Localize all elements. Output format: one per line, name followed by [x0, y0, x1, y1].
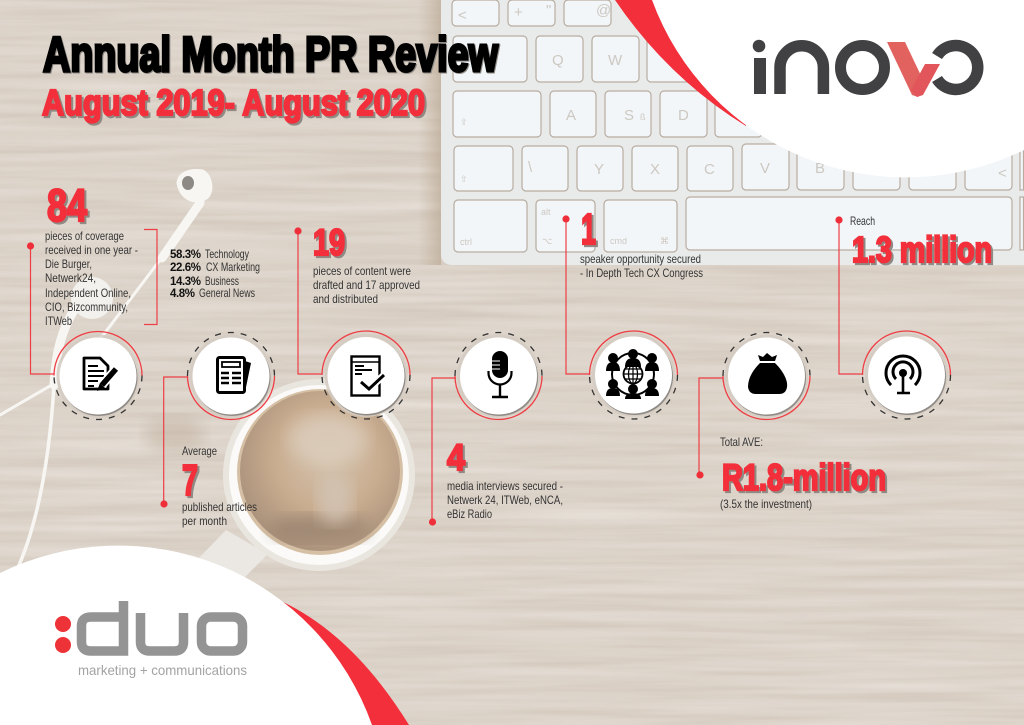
description: ITWeb	[45, 314, 72, 328]
keyboard photo	[441, 0, 1024, 265]
category breakdown: General News	[199, 286, 255, 300]
key legends: S	[624, 107, 634, 124]
title: Annual Month PR Review	[43, 28, 499, 82]
key legends	[458, 2, 1007, 247]
number: 1	[581, 205, 596, 254]
description: received in one year -	[45, 243, 138, 257]
number: 84	[47, 180, 87, 231]
connector dot	[562, 215, 570, 223]
number: 4	[447, 437, 465, 478]
category breakdown: Business	[205, 274, 239, 288]
number: 19	[313, 222, 345, 263]
key legends: ⇪	[460, 117, 468, 127]
key legends: V	[760, 160, 770, 177]
description: published articles	[182, 500, 257, 514]
number: 7	[182, 456, 198, 505]
key legends: W	[608, 52, 623, 69]
description	[313, 264, 420, 306]
description: drafted and 17 approved	[313, 278, 420, 292]
key legends: ctrl	[460, 237, 472, 247]
key legends: ⇧	[460, 174, 468, 184]
key legends: C	[704, 161, 715, 178]
bottom left white circle with red crescent	[0, 546, 409, 725]
description: Independent Online,	[45, 286, 131, 300]
connector dot	[27, 242, 34, 250]
key legends: D	[678, 107, 689, 124]
coffee cup photo	[197, 379, 415, 582]
description: and distributed	[313, 292, 378, 306]
item: 84 pieces of coverage	[27, 180, 260, 420]
note: (3.5x the investment)	[720, 497, 812, 511]
logo: duo	[55, 601, 247, 678]
key legends: Q	[552, 52, 564, 69]
connector	[298, 231, 322, 374]
key legends: X	[650, 161, 660, 178]
key legends: alt	[541, 207, 551, 217]
description: pieces of content were	[313, 264, 411, 278]
item: total AVE	[696, 332, 886, 511]
key legends: ß	[640, 112, 646, 122]
description	[182, 500, 257, 528]
description	[45, 229, 138, 328]
category breakdown: 4.8%	[170, 288, 195, 300]
connector	[699, 378, 723, 475]
connector dot	[160, 500, 168, 508]
description	[580, 252, 703, 280]
icon: broadcast signal	[862, 331, 950, 419]
description: eBiz Radio	[447, 507, 492, 521]
category breakdown: 58.3%	[170, 249, 201, 261]
description: - In Depth Tech CX Congress	[580, 266, 703, 280]
value: R1.8-million	[722, 457, 886, 498]
label: Total AVE:	[720, 435, 763, 449]
connector dot	[294, 227, 302, 235]
category breakdown: 22.6%	[170, 262, 201, 274]
description: CIO, Bizcommunity,	[45, 300, 128, 314]
key legends: ⌥	[542, 236, 552, 246]
connector dot	[696, 471, 704, 479]
key legends: B	[815, 160, 825, 177]
connector	[566, 219, 590, 374]
label: Average	[182, 444, 217, 458]
icon: network of people and globe	[590, 331, 678, 419]
category breakdown: CX Marketing	[206, 260, 260, 274]
earphones photo	[0, 170, 212, 572]
keyboard keys	[452, 0, 1024, 252]
category breakdown: Technology	[205, 247, 249, 261]
icon: money bag	[723, 332, 810, 419]
subtitle: August 2019- August 2020	[42, 82, 425, 123]
key legends: +	[514, 4, 523, 21]
top right white circle with red crescent	[615, 0, 1024, 177]
key legends: <	[458, 7, 467, 24]
value: 1.3 million	[852, 229, 992, 270]
item: reach	[835, 214, 992, 419]
icon: microphone	[455, 332, 542, 419]
description: Netwerk24,	[45, 271, 96, 285]
description: speaker opportunity secured	[580, 252, 701, 266]
description: media interviews secured -	[447, 479, 563, 493]
connector	[30, 246, 54, 374]
label: Reach	[850, 214, 875, 228]
category breakdown	[170, 247, 260, 300]
description: pieces of coverage	[45, 229, 124, 243]
description: per month	[182, 514, 227, 528]
key legends: ⌘	[660, 236, 669, 246]
connector	[839, 220, 863, 374]
connector	[164, 377, 188, 504]
icon: newspaper	[188, 332, 274, 419]
key legends: "	[546, 2, 551, 19]
key legends: A	[566, 107, 576, 124]
key legends: @	[596, 2, 611, 19]
connector	[432, 378, 456, 522]
connector dot	[429, 518, 436, 526]
key legends: <	[998, 165, 1007, 182]
logo: duo: marketing + communications	[78, 662, 247, 678]
description	[447, 479, 563, 521]
item: average 7 published articles	[160, 332, 274, 528]
item: 4 media interviews	[429, 332, 563, 526]
bracket	[144, 230, 157, 324]
category breakdown: 14.3%	[170, 276, 201, 288]
description: Netwerk 24, ITWeb, eNCA,	[447, 493, 563, 507]
connector dot	[835, 216, 843, 224]
item: 1 speaker opportunity	[562, 205, 703, 419]
item: 19 pieces of content	[294, 222, 420, 419]
key legends: \	[528, 159, 533, 176]
key legends: cmd	[610, 236, 627, 246]
icon: checklist	[322, 331, 410, 419]
key legends: Y	[594, 161, 604, 178]
logo: inovo	[753, 40, 978, 97]
description: Die Burger,	[45, 257, 92, 271]
icon: document and pen	[54, 332, 142, 420]
